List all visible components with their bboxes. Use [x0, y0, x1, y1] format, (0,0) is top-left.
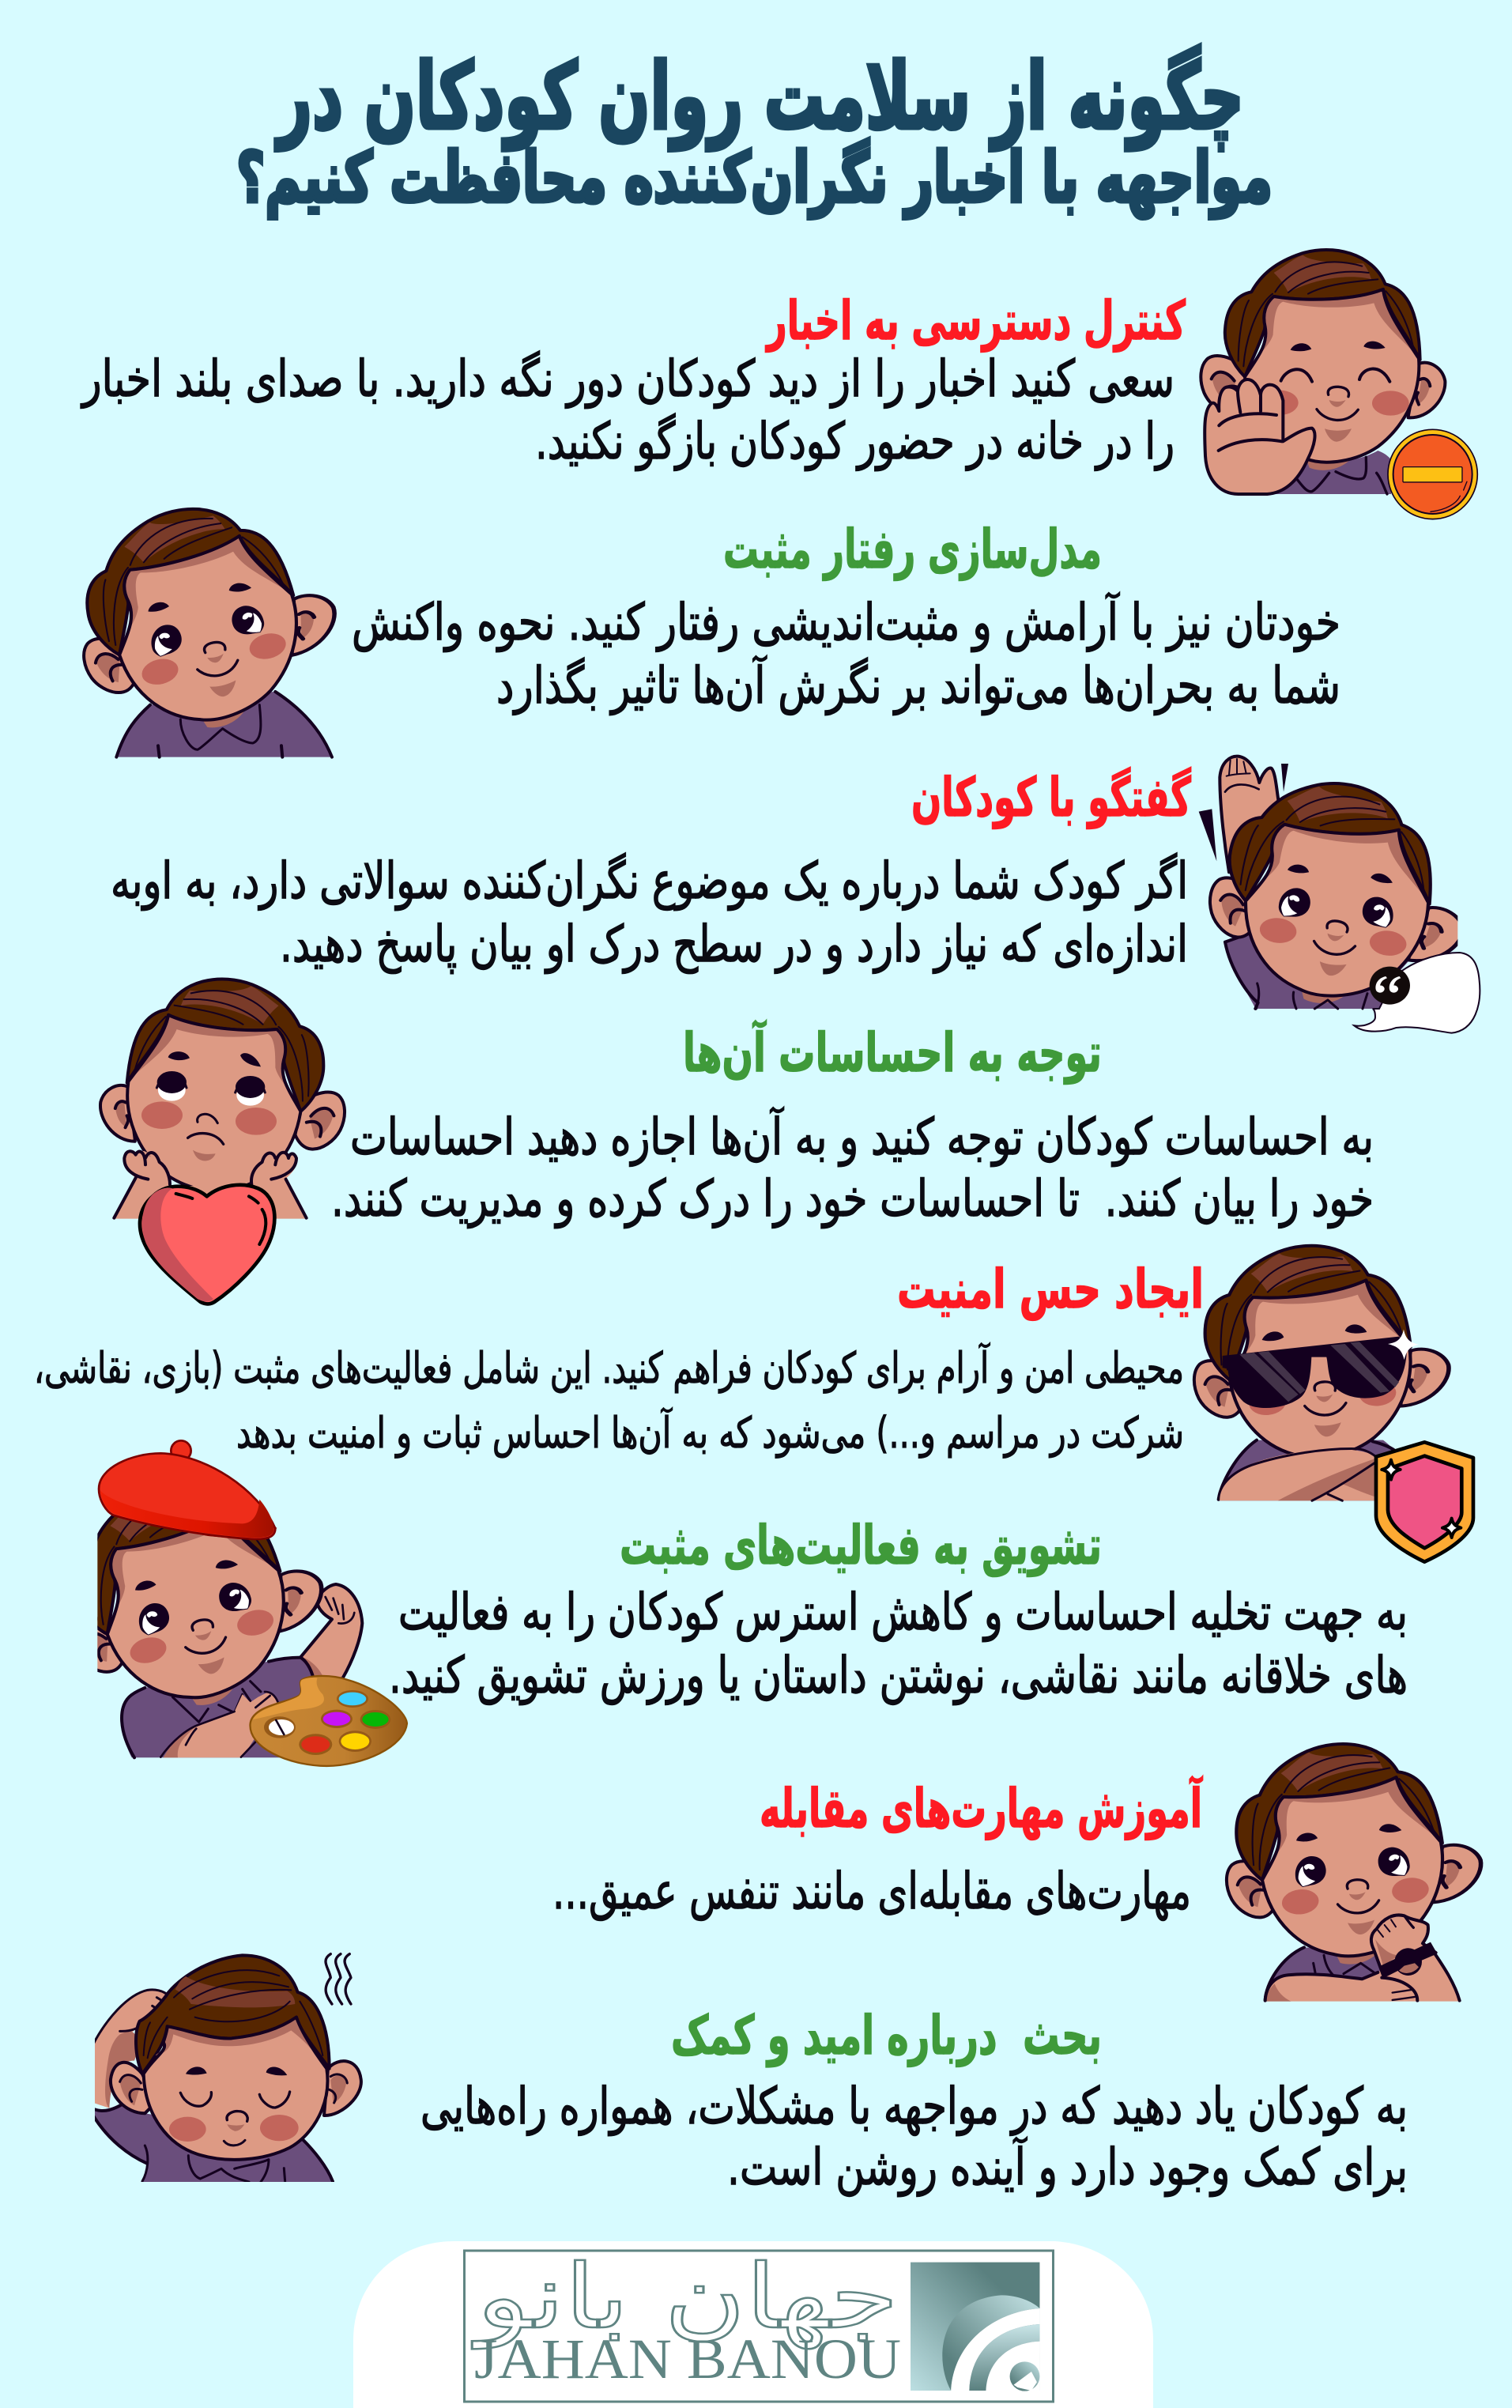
- title: مواجهه با اخبار نگران‌کننده محافظت کنیم؟: [236, 137, 1273, 219]
- title: [236, 43, 1273, 219]
- body text: اندازه‌ای که نیاز دارد و در سطح درک او بیان پاسخ دهید.: [280, 915, 1188, 974]
- heading: گفتگو با کودکان: [911, 767, 1191, 829]
- panel: footer logo: [353, 2241, 1153, 2408]
- panel: positive role modelling: [55, 480, 1340, 757]
- icon: boy raising arm with speech bubble: [1199, 757, 1480, 1033]
- body text: [389, 1583, 1408, 1705]
- heading: تشویق به فعالیت‌های مثبت: [620, 1515, 1102, 1577]
- body text: اگر کودک شما درباره یک موضوع نگران‌کننده سوالاتی دارد، به اوبه: [111, 852, 1188, 911]
- icon: calm boy scratching head: [93, 1954, 361, 2182]
- panel: encouraging positive activities: [40, 1440, 1408, 1766]
- body text: شرکت در مراسم و...) می‌شود که به آن‌ها احساس ثبات و امنیت بدهد: [236, 1407, 1184, 1458]
- icon: boy with sunglasses and shield: [1183, 1234, 1473, 1562]
- body text: [111, 852, 1188, 974]
- body text: [420, 2078, 1408, 2197]
- logo wordmark: JAHAN BANOU: [474, 2327, 901, 2391]
- icon: artist boy with beret and palette: [97, 1440, 408, 1768]
- heading: بحث درباره امید و کمک: [671, 2005, 1102, 2067]
- body text: [352, 591, 1340, 715]
- panel: news access control: [81, 250, 1477, 519]
- icon: thoughtful boy holding heart: [95, 972, 353, 1304]
- panel: coping skills: [552, 1730, 1491, 2002]
- body text: [331, 1106, 1374, 1229]
- body text: محیطی امن و آرام برای کودکان فراهم کنید. این شامل فعالیت‌های مثبت (بازی، نقاشی،: [34, 1342, 1184, 1393]
- icon: smiling boy: [55, 480, 355, 757]
- icon: boy raising hand with stop sign: [1201, 250, 1477, 519]
- body text: [81, 350, 1175, 471]
- white rounded footer shape: [353, 2241, 1153, 2408]
- heading: آموزش مهارت‌های مقابله: [760, 1775, 1203, 1840]
- heading: مدل‌سازی رفتار مثبت: [723, 519, 1102, 581]
- logo wordmark: جهان بانو: [472, 2246, 899, 2349]
- heading: توجه به احساسات آن‌ها: [683, 1019, 1102, 1085]
- body text: [34, 1342, 1184, 1458]
- body text: را در خانه در حضور کودکان بازگو نکنید.: [535, 413, 1175, 471]
- body text: خودتان نیز با آرامش و مثبت‌اندیشی رفتار کنید. نحوه واکنش: [352, 591, 1340, 652]
- body text: سعی کنید اخبار را از دید کودکان دور نگه دارید. با صدای بلند اخبار: [81, 350, 1175, 409]
- logo frame: [465, 2251, 1053, 2402]
- panel: attention to feelings: [95, 972, 1374, 1304]
- panel: talking with the child: [111, 757, 1480, 1033]
- icon: boy with hand on chin and watch: [1213, 1730, 1491, 2002]
- body text: مهارت‌های مقابله‌ای مانند تنفس عمیق...: [552, 1863, 1191, 1921]
- logo emblem: [911, 2263, 1039, 2391]
- heading: کنترل دسترسی به اخبار: [765, 290, 1186, 353]
- body text: شما به بحران‌ها می‌تواند بر نگرش آن‌ها تاثیر بگذارد: [496, 655, 1340, 715]
- logo wordmark: [472, 2246, 901, 2391]
- heading: ایجاد حس امنیت: [897, 1259, 1204, 1321]
- panel: talking about hope and help: [93, 1954, 1408, 2197]
- panel: sense of security: [34, 1234, 1473, 1562]
